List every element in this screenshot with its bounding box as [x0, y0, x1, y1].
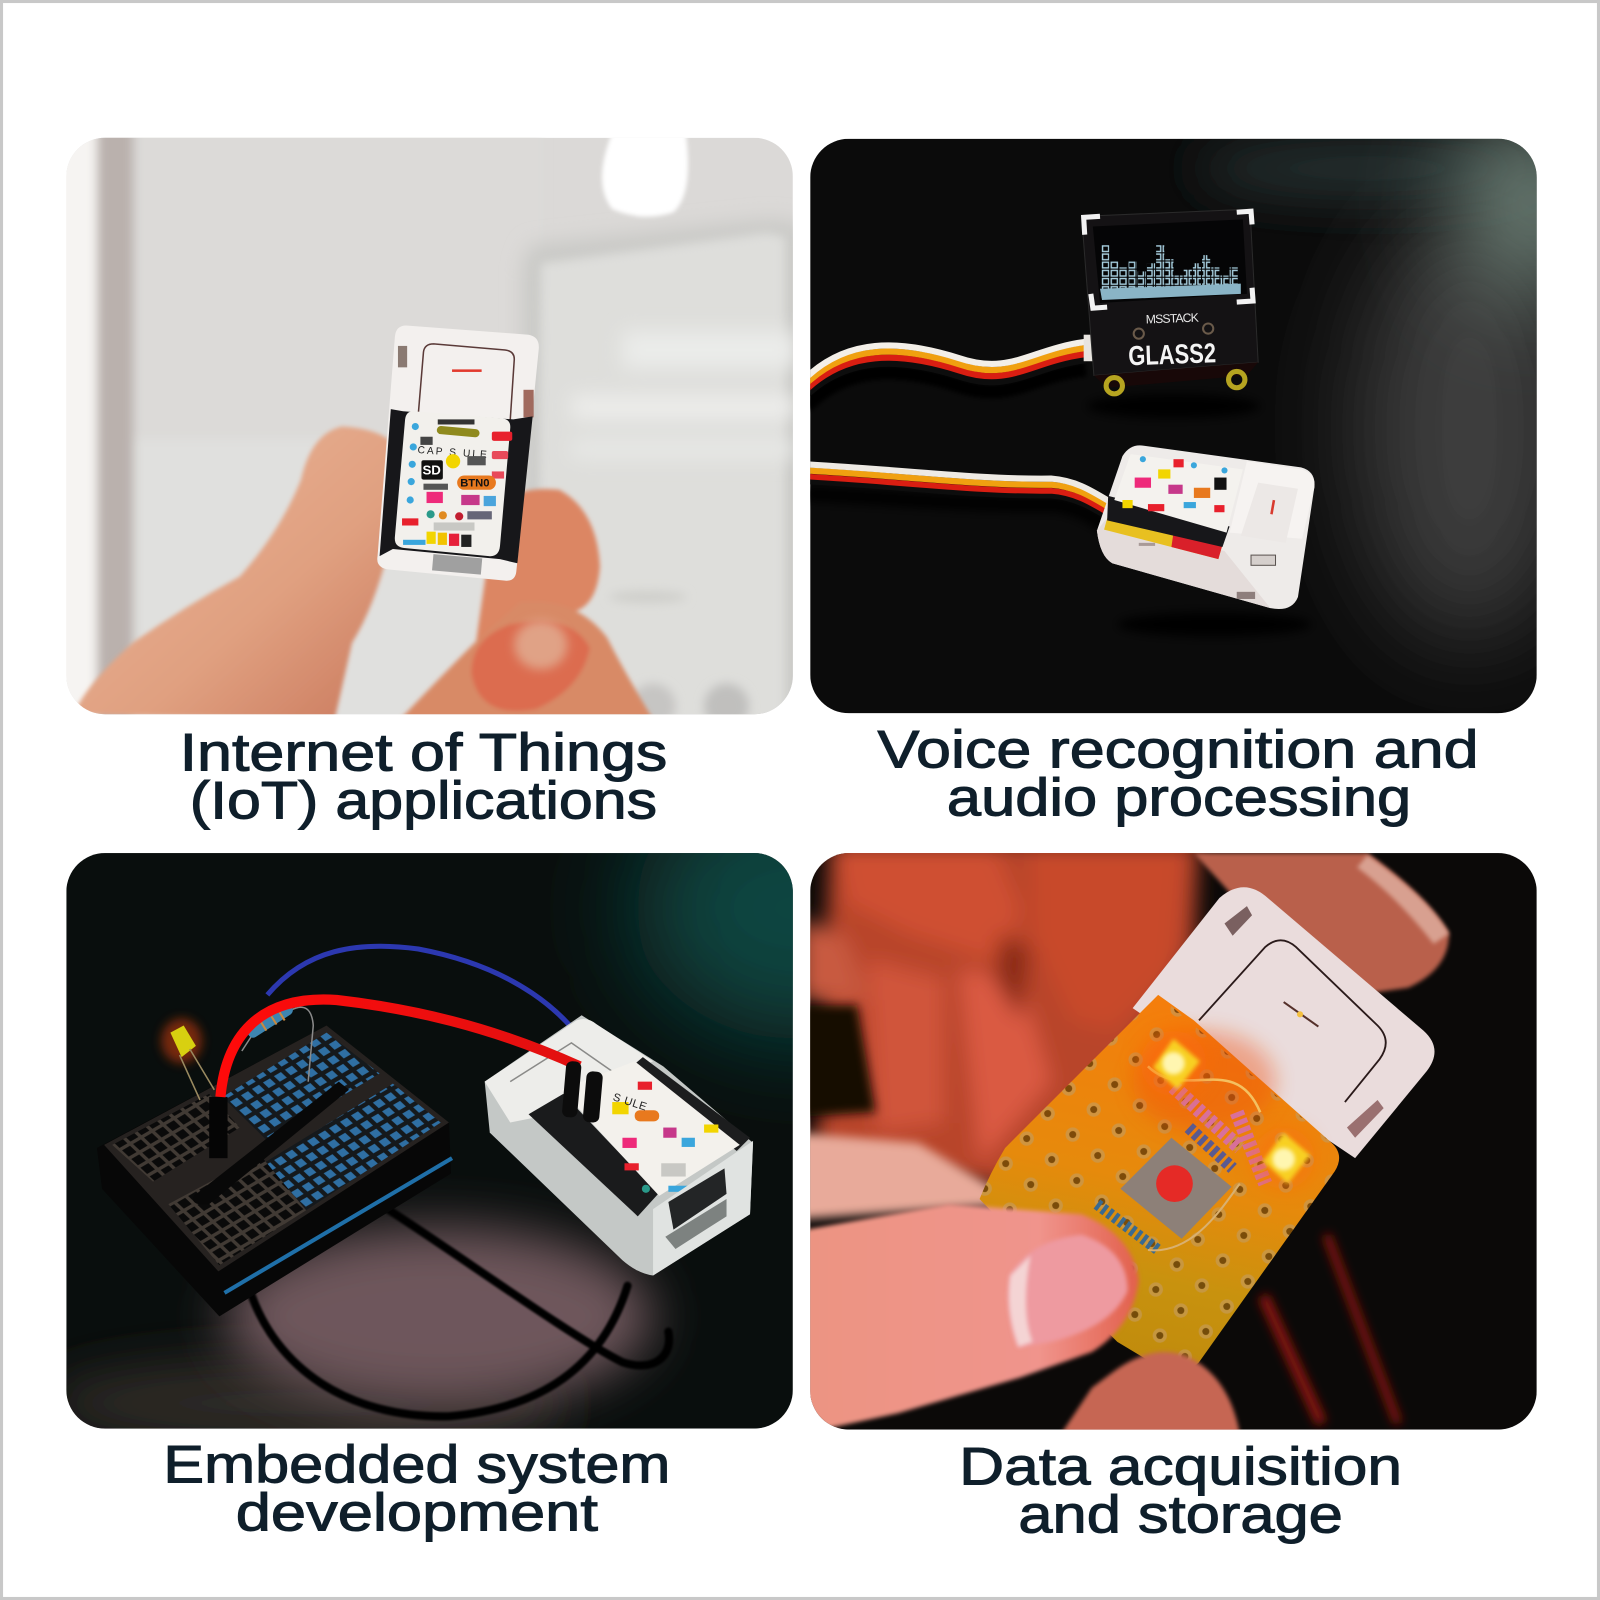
caption: Voice recognition: Voice recognition and [878, 720, 1479, 779]
side shading [1097, 520, 1270, 608]
dark gap left of palm [796, 1005, 876, 1117]
LED [161, 1018, 214, 1100]
centre channel [193, 1082, 349, 1204]
mounting holes [1106, 378, 1122, 394]
resistor [242, 1007, 313, 1082]
push button [1120, 1138, 1232, 1239]
upper cable [806, 342, 1086, 406]
caption: Voice recognition [878, 720, 1479, 827]
LED slit [1284, 1002, 1318, 1027]
black board [380, 409, 533, 563]
jumper plugs [562, 1061, 603, 1123]
caption: Voice recognition: audio processing [947, 768, 1411, 827]
sticker [395, 411, 510, 556]
pale palm [796, 1133, 1020, 1219]
wire shadows on table [250, 1209, 669, 1416]
red light streaks [1263, 1235, 1398, 1423]
board header row [1104, 518, 1222, 559]
USB connector [432, 554, 482, 575]
lower cable [806, 464, 1112, 531]
caption: Embedded system [163, 1436, 670, 1543]
index finger and back of hand [73, 427, 400, 719]
blue side stripe [224, 1158, 452, 1293]
back of hand fingers [800, 843, 1199, 1194]
Capsule device on base [485, 1015, 753, 1276]
device: white case with sticker [377, 326, 539, 581]
hole grids [222, 1033, 380, 1141]
case slots [1224, 906, 1252, 936]
caption: Data acquisition: and storage [1018, 1486, 1343, 1545]
lower table tone [41, 1357, 571, 1449]
red LED dash [452, 369, 482, 372]
blurred glass pane [522, 219, 806, 735]
panel: Internet of Things photo [66, 138, 793, 714]
MSSTACK label: MSSTACK [1146, 311, 1200, 326]
black jumper header on breadboard [209, 1097, 228, 1158]
sticker labels: SD [422, 462, 441, 477]
red glow over PCB [1133, 1031, 1276, 1133]
light falloff on table [1190, 138, 1537, 674]
pink-brown light pool [224, 1227, 653, 1406]
resistors [1097, 1066, 1265, 1250]
caption: Internet of Things [180, 723, 667, 830]
glowing LEDs [1141, 1031, 1206, 1096]
blue jumper wire [267, 946, 607, 1087]
panel: Voice recognition photo [810, 138, 1537, 714]
sticker [1114, 498, 1228, 533]
sticker colour marks [1122, 456, 1228, 512]
clip details [1251, 555, 1276, 565]
thumb [471, 621, 590, 711]
Capsule device in white case [1097, 445, 1315, 637]
lower finger [1061, 1352, 1240, 1434]
teal vignette [596, 853, 793, 1101]
spectrum bars [1101, 245, 1238, 298]
OLED module [1082, 209, 1260, 418]
case lid [1314, 479, 1315, 491]
red LED dash [1270, 500, 1275, 514]
screen corner brackets [1084, 211, 1253, 308]
breadboard [97, 1026, 452, 1316]
case slots [398, 346, 407, 367]
ceiling light reflection [602, 133, 688, 217]
sticker [561, 1061, 740, 1196]
sticker colour marks [611, 1082, 718, 1193]
sticker labels: CAP S ULE [417, 445, 487, 461]
big thumb [806, 1204, 1139, 1429]
window outline [1199, 940, 1386, 1102]
caption: Embedded system: Embedded system [163, 1436, 670, 1495]
GLASS2 label: GLASS2 [1128, 337, 1216, 371]
sticker labels: BTN0 [460, 478, 490, 490]
front connector cavity [668, 1168, 727, 1230]
sticker colour marks: S ULE [611, 1091, 648, 1114]
white lid [485, 1019, 653, 1122]
caption: Internet of Things: (IoT) applications [190, 771, 657, 830]
white device case [1133, 887, 1435, 1158]
right face highlight [653, 1141, 753, 1276]
window outline [418, 344, 514, 420]
header strips [529, 1094, 658, 1216]
hand holding device [73, 427, 653, 719]
red button cap [1156, 1165, 1193, 1202]
top right finger [1194, 853, 1449, 995]
thumbnail [514, 620, 567, 669]
caption: Data acquisition: Data acquisition [959, 1438, 1402, 1497]
red jumper wire [220, 1000, 580, 1097]
caption: Internet of Things: Internet of Things [180, 723, 667, 782]
panel: Data acquisition photo [796, 843, 1537, 1434]
panel: Embedded system photo [66, 853, 793, 1429]
lower fingers [474, 489, 600, 653]
OLED screen [1093, 219, 1247, 303]
caption: Data acquisition [959, 1438, 1402, 1545]
blurred wall edge [66, 138, 541, 714]
orange PCB [980, 995, 1339, 1372]
sticker labels [402, 419, 512, 547]
caption: Embedded system: development [236, 1484, 598, 1543]
